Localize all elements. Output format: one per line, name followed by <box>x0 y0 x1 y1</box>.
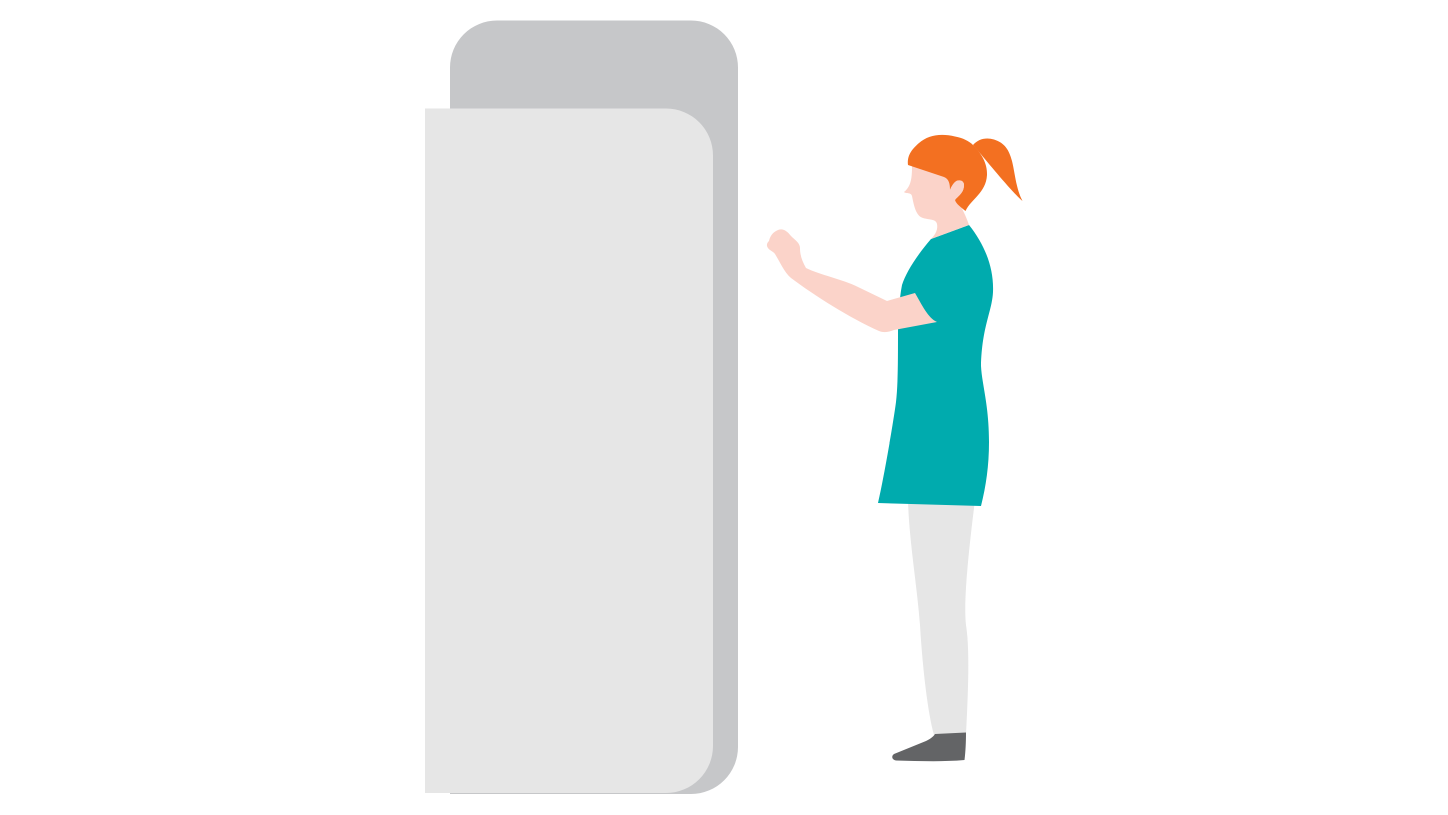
hair <box>908 135 987 211</box>
arm <box>767 229 937 332</box>
neck and head <box>904 165 969 239</box>
ponytail <box>973 138 1022 201</box>
back card <box>450 20 738 794</box>
dress <box>878 225 993 506</box>
shoe <box>892 732 966 761</box>
figure: woman <box>767 135 1022 761</box>
trousers <box>908 500 975 735</box>
front card <box>425 108 713 793</box>
ear <box>950 180 964 200</box>
